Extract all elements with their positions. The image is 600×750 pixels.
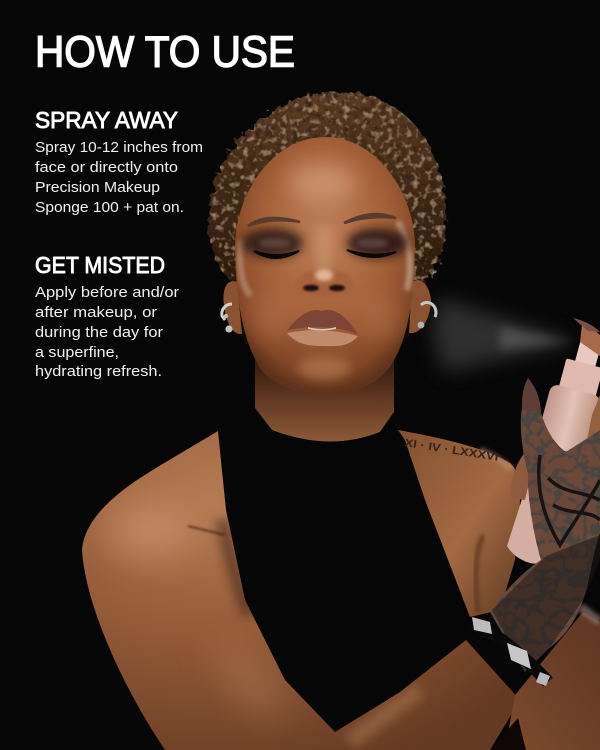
- shoulder tattoo: XI · IV · LXXXVI: [404, 437, 499, 464]
- misting instructions: a superfine,: [35, 344, 119, 361]
- top nail: [573, 318, 600, 332]
- right shoulder: [398, 430, 520, 617]
- hand and wrist with tattoo: [490, 408, 600, 672]
- neck: [255, 360, 394, 442]
- front nail: [522, 378, 541, 412]
- section: get misted: [35, 252, 179, 380]
- bottle of makeup mist: [507, 333, 600, 564]
- hair: [209, 92, 446, 282]
- gap between the arms: [490, 718, 526, 750]
- wrist tattoo shading: [492, 535, 600, 672]
- nose: [295, 269, 353, 298]
- main heading: HOW TO USE: [35, 28, 295, 76]
- tattooed hand: [490, 318, 600, 672]
- face highlights: [240, 163, 410, 379]
- lower right arm: [505, 612, 600, 750]
- misting instructions: during the day for: [35, 324, 163, 341]
- spray mist: [434, 298, 576, 372]
- black dress: [218, 408, 470, 732]
- right eye: [347, 228, 409, 258]
- right ear and earrings: [409, 280, 436, 333]
- bracelet: [472, 617, 550, 686]
- back fingers: [511, 450, 532, 500]
- lips: [287, 310, 358, 346]
- upper bottle: [535, 333, 600, 457]
- spray instructions: face or directly onto: [35, 159, 178, 176]
- left eye: [241, 228, 303, 258]
- misting instructions: after makeup, or: [35, 304, 157, 321]
- spray instructions: Precision Makeup: [35, 179, 160, 196]
- eyebrows: [248, 214, 396, 226]
- spray instructions: [35, 139, 203, 216]
- pale arm edge: [580, 607, 600, 622]
- left arm and shoulder: [82, 431, 520, 750]
- misting instructions: hydrating refresh.: [35, 363, 162, 380]
- top finger: [580, 325, 600, 356]
- face: [235, 137, 415, 393]
- arm highlights: [105, 502, 420, 742]
- pale shoulder edge: [480, 450, 512, 470]
- bottle shoulder: [535, 383, 600, 457]
- spray instructions: Spray 10-12 inches from: [35, 139, 203, 156]
- misting instructions: Apply before and/or: [35, 284, 179, 301]
- bottle body: [507, 480, 555, 564]
- heading: spray away: SPRAY AWAY: [35, 107, 178, 133]
- spray instructions: Sponge 100 + pat on.: [35, 199, 184, 216]
- bottle collar: [558, 358, 600, 399]
- hand tattoo lines: [539, 455, 600, 545]
- left ear and earrings: [222, 281, 242, 334]
- section: spray away: [35, 107, 203, 216]
- heading: get misted: GET MISTED: [35, 252, 165, 278]
- upper arm crease: [476, 535, 483, 612]
- woman portrait: [82, 92, 600, 750]
- right palm edge: [585, 395, 600, 450]
- bottle cap: [575, 338, 600, 368]
- misting instructions: [35, 284, 179, 380]
